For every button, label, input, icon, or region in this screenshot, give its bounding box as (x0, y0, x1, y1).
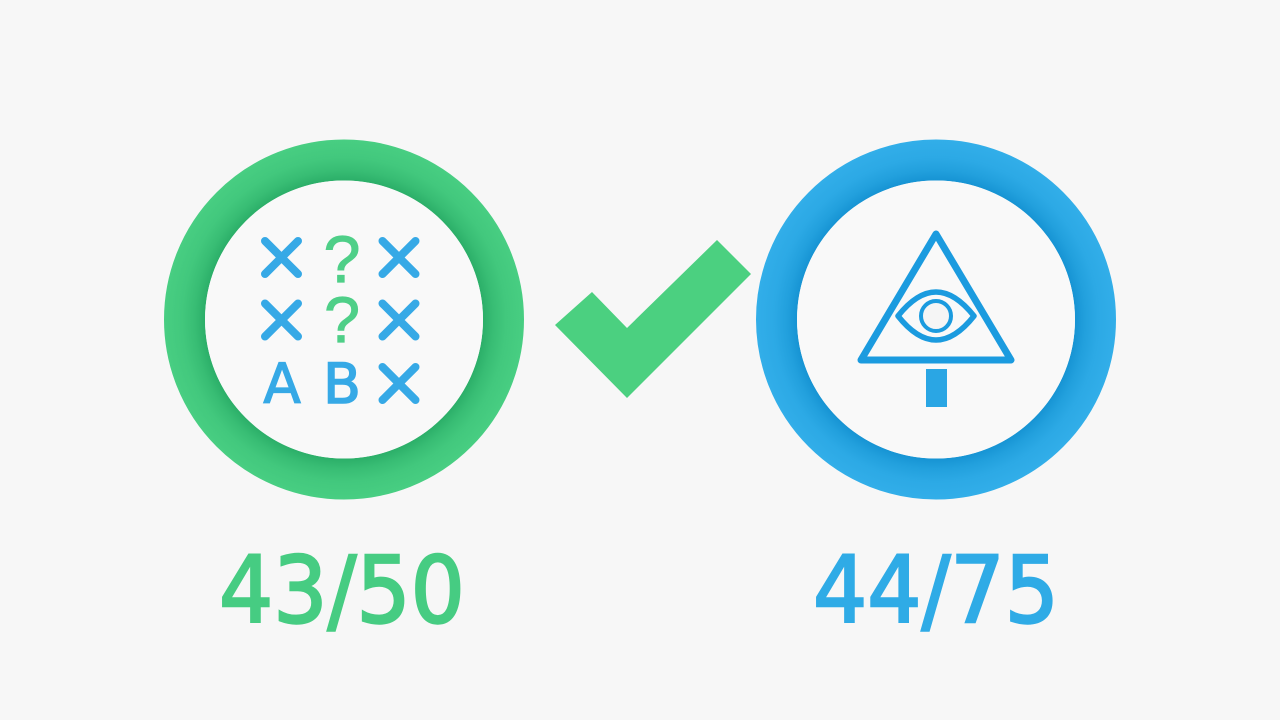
score: 43/50: 43/50 (219, 537, 465, 644)
icon: cross row 1 left (265, 241, 298, 274)
icon: green check mark (555, 240, 751, 398)
icon: cross row 2 right (382, 304, 416, 336)
ring inner face (205, 180, 483, 458)
blue ring (776, 160, 1096, 479)
letter B: B (323, 352, 361, 416)
question mark row 1: ? (324, 222, 360, 296)
panel: green quiz score circle (184, 160, 504, 479)
ring inner face (797, 180, 1075, 458)
icon: eye in triangle on a post (861, 234, 1011, 407)
icon: cross row 2 left (265, 304, 298, 336)
icon: cross row 1 right (382, 241, 416, 274)
post (926, 369, 947, 407)
panel: blue vision score circle (776, 160, 1096, 479)
letter A: A (263, 352, 301, 416)
iris ring (921, 301, 951, 331)
triangle outline (861, 234, 1011, 360)
green ring (184, 160, 504, 479)
score: 44/75: 44/75 (813, 537, 1059, 644)
icon: cross row 3 right (382, 367, 416, 400)
question mark row 2: ? (324, 284, 360, 356)
icon: answer grid of crosses, question marks and letters (263, 222, 416, 416)
eye outline (898, 292, 974, 340)
